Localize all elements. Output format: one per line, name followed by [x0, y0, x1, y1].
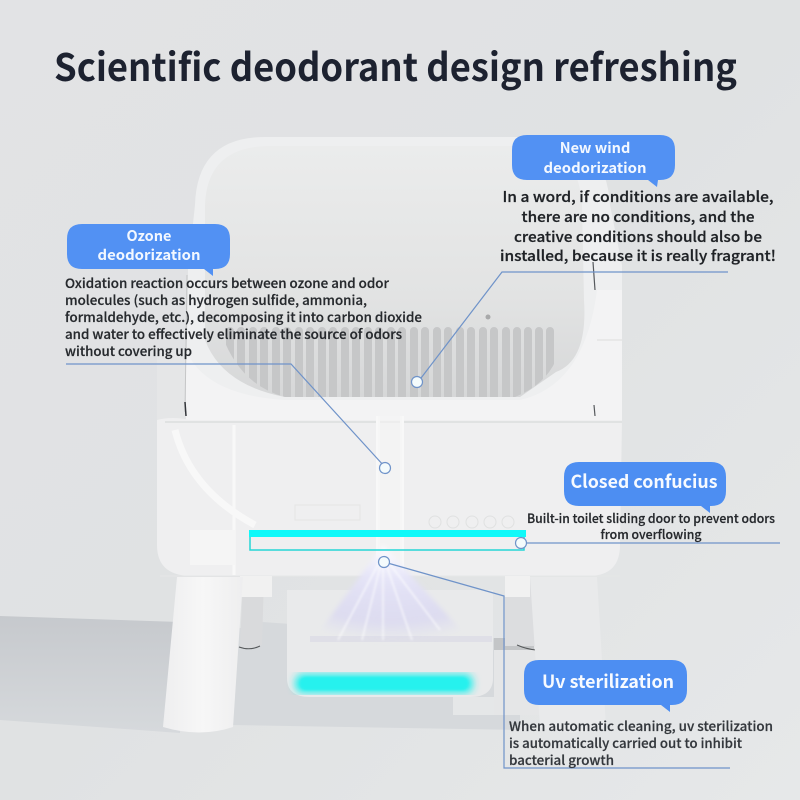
callout: closed confucius [527, 462, 775, 543]
label bubble [524, 660, 687, 712]
description: there are no conditions, and the [522, 206, 754, 227]
label bubble: deodorization [544, 157, 646, 178]
description: When automatic cleaning, uv sterilization [509, 716, 773, 735]
description [527, 508, 775, 543]
description: without covering up [65, 341, 192, 360]
waste bin [287, 590, 493, 697]
vent grille [230, 314, 550, 400]
title: Scientific deodorant design refreshing [54, 37, 737, 92]
product: litter box [157, 137, 622, 732]
description: Built-in toilet sliding door to prevent odors [527, 508, 775, 527]
label bubble: Closed confucius [570, 468, 718, 494]
hood and bowl [157, 137, 622, 420]
callout: uv sterilization [509, 660, 773, 769]
front legs [163, 577, 606, 732]
description: bacterial growth [509, 750, 614, 769]
description: from overflowing [600, 524, 702, 543]
description [65, 273, 422, 360]
description: formaldehyde, etc.), decomposing it into carbon dioxide [65, 307, 422, 326]
label bubble: Uv sterilization [542, 668, 674, 694]
description: and water to effectively eliminate the source of odors [65, 324, 402, 343]
description: creative conditions should also be [514, 226, 762, 247]
cyan glow in bin [295, 674, 473, 693]
transparent band [157, 416, 622, 597]
label bubble: Ozone [127, 225, 171, 246]
back legs [239, 578, 538, 650]
label bubble [512, 135, 675, 187]
description: is automatically carried out to inhibit [509, 733, 742, 752]
uv light beam [312, 545, 472, 642]
cyan sliding door [249, 530, 526, 550]
label bubble: deodorization [98, 244, 200, 265]
label bubble [564, 462, 726, 513]
description: In a word, if conditions are available, [502, 186, 774, 207]
description: Oxidation reaction occurs between ozone and odor [65, 273, 390, 292]
leader lines [66, 272, 780, 768]
description [500, 186, 776, 266]
callout dots [378, 376, 526, 568]
description [509, 716, 773, 769]
label bubble [67, 224, 230, 276]
callout: ozone deodorization [65, 224, 422, 360]
label bubble: New wind [560, 137, 630, 158]
description: molecules (such as hydrogen sulfide, ammonia, [65, 290, 367, 309]
description: installed, because it is really fragrant! [500, 245, 776, 266]
callout: new wind deodorization [500, 135, 776, 266]
